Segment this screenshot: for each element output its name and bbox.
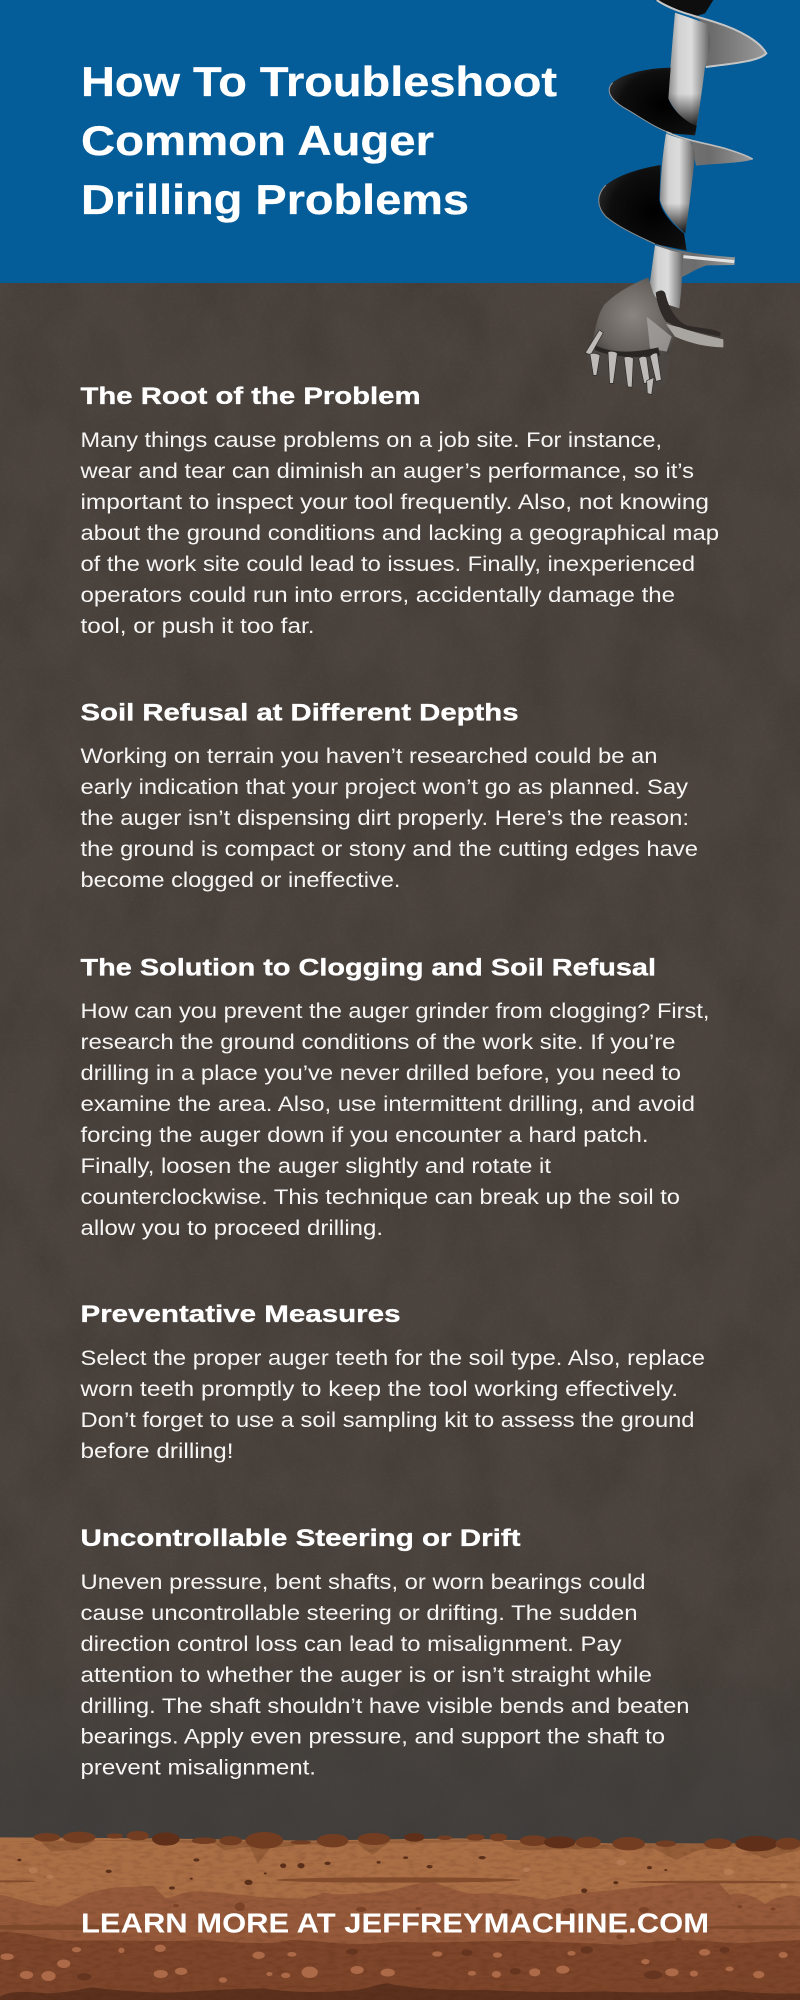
base shadow of cutter <box>586 348 670 393</box>
dark soil layer <box>0 1932 800 2000</box>
upper dark flight <box>609 68 697 135</box>
body text: direction control loss can lead to misalignment. Pay <box>80 1632 622 1656</box>
lower dark flight <box>599 165 687 251</box>
middle soil layer <box>0 1882 800 2000</box>
body text: Select the proper auger teeth for the soil type. Also, replace <box>80 1346 705 1370</box>
cutter head <box>590 277 676 362</box>
section: soil refusal at different depths <box>80 700 698 892</box>
topsoil shadow drips <box>0 1839 800 1863</box>
body text: Many things cause problems on a job site. For instance, <box>80 428 662 452</box>
icon: auger drill bit <box>585 0 766 395</box>
body text: counterclockwise. This technique can break up the soil to <box>80 1185 680 1209</box>
body text: about the ground conditions and lacking a geographical map <box>80 521 719 545</box>
title: How To Troubleshoot <box>81 58 557 105</box>
body text <box>79 428 719 638</box>
section: uncontrollable steering or drift <box>80 1525 690 1780</box>
body text: allow you to proceed drilling. <box>80 1216 383 1240</box>
title: Common Auger <box>81 117 434 164</box>
body text: become clogged or ineffective. <box>80 868 401 892</box>
dark stones in middle layer <box>173 1902 776 1941</box>
body text: the auger isn’t dispensing dirt properly. Here’s the reason: <box>80 806 689 830</box>
footer: soil layers illustration <box>0 1831 800 2000</box>
body text: bearings. Apply even pressure, and support the shaft to <box>80 1724 665 1748</box>
lower right flight <box>655 243 735 277</box>
body text: research the ground conditions of the work site. If you’re <box>80 1030 676 1054</box>
deepest soil layer <box>0 1983 800 2000</box>
body text: Don’t forget to use a soil sampling kit to assess the ground <box>80 1408 694 1432</box>
body text: early indication that your project won’t go as planned. Say <box>80 775 688 799</box>
heading: Preventative Measures <box>80 1301 400 1328</box>
body text: How can you prevent the auger grinder from clogging? First, <box>80 999 710 1023</box>
body text: before drilling! <box>80 1439 234 1463</box>
upper shaft <box>668 13 710 128</box>
body text <box>80 744 698 892</box>
head centre highlight <box>647 317 672 352</box>
body text: forcing the auger down if you encounter a hard patch. <box>80 1123 648 1147</box>
body text: drilling. The shaft shouldn’t have visible bends and beaten <box>80 1694 690 1718</box>
body text: prevent misalignment. <box>80 1756 316 1780</box>
middle shaft <box>660 133 695 233</box>
body text: the ground is compact or stony and the cutting edges have <box>80 837 698 861</box>
body text: Uneven pressure, bent shafts, or worn bearings could <box>80 1570 646 1594</box>
middle right flight <box>667 132 753 166</box>
body text: cause uncontrollable steering or drifting. The sudden <box>80 1601 638 1625</box>
cutter teeth <box>585 330 661 395</box>
heading: Uncontrollable Steering or Drift <box>80 1525 520 1552</box>
body text: drilling in a place you’ve never drilled before, you need to <box>80 1061 681 1085</box>
body text <box>79 1346 705 1463</box>
right cutting blade <box>656 290 721 337</box>
section: preventative measures <box>79 1301 705 1463</box>
section: the solution to clogging and soil refusal <box>80 954 710 1240</box>
textured dark background <box>0 283 800 1845</box>
top dark stub <box>655 0 713 16</box>
body text <box>80 999 710 1240</box>
heading: The Solution to Clogging and Soil Refusal <box>80 954 656 982</box>
body text: tool, or push it too far. <box>80 614 314 638</box>
body text: examine the area. Also, use intermittent drilling, and avoid <box>80 1092 695 1116</box>
pale stones in dark layer <box>1 1945 788 1983</box>
pale stones in topsoil <box>29 1859 787 1888</box>
tan topsoil layer <box>0 1837 800 2000</box>
body text: important to inspect your tool frequently. Also, not knowing <box>80 490 709 514</box>
specks in topsoil <box>17 1856 667 1893</box>
dark stones in dark layer <box>77 1946 730 1980</box>
heading: Soil Refusal at Different Depths <box>80 700 518 726</box>
body text: of the work site could lead to issues. Finally, inexperienced <box>80 552 695 576</box>
body text: worn teeth promptly to keep the tool working effectively. <box>79 1377 678 1401</box>
body text: attention to whether the auger is or isn’t straight while <box>80 1663 652 1687</box>
dark streaks <box>0 1877 800 1982</box>
heading: The Root of the Problem <box>80 383 420 410</box>
pebbles on surface <box>34 1831 800 1851</box>
title: Drilling Problems <box>81 176 469 223</box>
section: the root of the problem <box>79 383 719 638</box>
body text: wear and tear can diminish an auger’s performance, so it’s <box>79 459 694 483</box>
body text <box>80 1570 690 1780</box>
title <box>81 58 557 223</box>
lower shaft <box>649 245 683 308</box>
body text: Working on terrain you haven’t researched could be an <box>80 744 658 768</box>
call to action: LEARN MORE AT JEFFREYMACHINE.COM <box>81 1908 709 1938</box>
soil texture <box>0 1843 800 2000</box>
body text: Finally, loosen the auger slightly and rotate it <box>80 1154 551 1178</box>
upper right flight <box>657 0 766 67</box>
header banner <box>0 0 800 283</box>
body text: operators could run into errors, accidentally damage the <box>80 583 675 607</box>
